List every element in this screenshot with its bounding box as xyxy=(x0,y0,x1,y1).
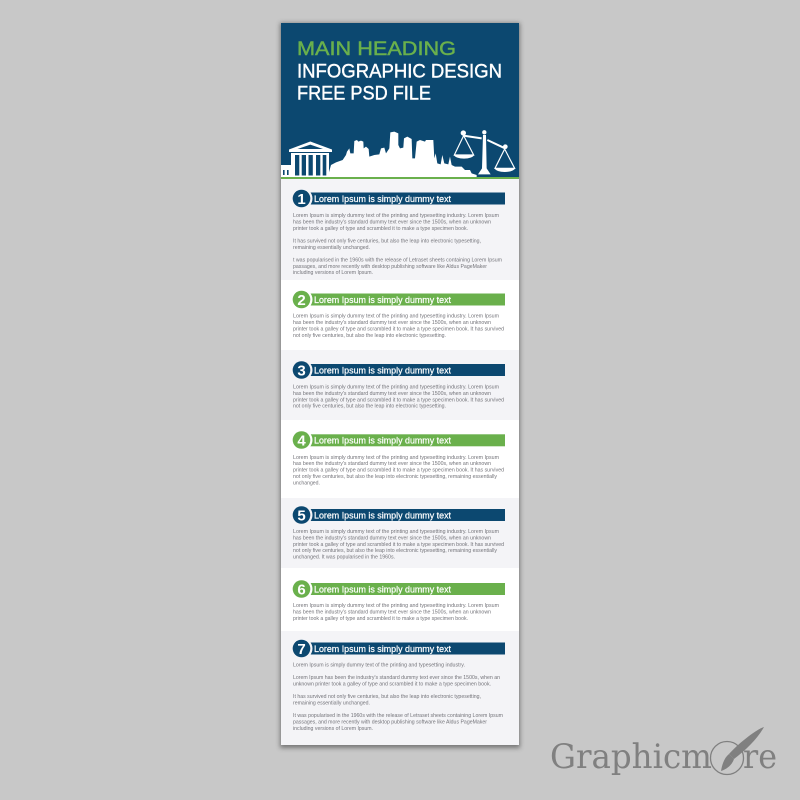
section 1 number badge xyxy=(292,188,312,209)
panel: section 3 xyxy=(281,350,519,420)
section 7 body text: It has survived not only five centuries, but also the leap into electronic typesetting, xyxy=(293,694,481,700)
panel: section 7 xyxy=(281,631,519,745)
section 7 body text: Lorem Ipsum is simply dummy text of the printing and typesetting industry. xyxy=(293,663,465,669)
section 3 title bar xyxy=(310,364,505,376)
section 5 number badge: 5 xyxy=(297,508,306,524)
header panel xyxy=(281,23,519,177)
section 1 body text xyxy=(293,213,502,276)
logo suffix: re xyxy=(743,737,777,777)
section 5 body text: printer took a galley of type and scrambled it to make a type specimen book. It has survived xyxy=(293,542,504,548)
section 4 body text: Lorem Ipsum is simply dummy text of the printing and typesetting industry. Lorem Ipsum xyxy=(293,455,499,461)
section 3 body text xyxy=(293,384,504,410)
section 5 body text xyxy=(293,529,504,561)
section 2 body text: Lorem Ipsum is simply dummy text of the printing and typesetting industry. Lorem Ipsum xyxy=(293,314,499,320)
panel: section 2 xyxy=(281,280,519,350)
section 1 body text: It has survived not only five centuries, but also the leap into electronic typesetting, xyxy=(293,239,481,245)
icon: scales of justice xyxy=(454,130,515,174)
section 5 body text: has been the industry's standard dummy text ever since the 1500s, when an unknown xyxy=(293,535,491,541)
section 4 body text: unchanged. xyxy=(293,480,320,486)
subheading line 1: INFOGRAPHIC DESIGN xyxy=(297,60,502,82)
icon: brush in circle xyxy=(710,727,764,774)
main heading: MAIN HEADING xyxy=(297,38,456,60)
section 1 body text: t was popularised in the 1960s with the release of Letraset sheets containing Lorem Ipsum xyxy=(293,257,502,263)
section 4 body text xyxy=(293,455,504,486)
section 6 body text: has been the industry's standard dummy text ever since the 1500s, when an unknown xyxy=(293,609,491,615)
section 4 title: Lorem Ipsum is simply dummy text xyxy=(314,436,451,446)
section 2 body text: has been the industry's standard dummy text ever since the 1500s, when an unknown xyxy=(293,320,491,326)
section 7 title bar xyxy=(310,642,505,654)
city skyline xyxy=(328,132,477,177)
section 7 body text: unknown printer took a galley of type and scrambled it to make a type specimen book. xyxy=(293,682,491,688)
panel: section 5 xyxy=(281,498,519,568)
section 1 body text: has been the industry's standard dummy text ever since the 1500s, when an unknown xyxy=(293,219,491,225)
section 6 body text xyxy=(293,603,499,622)
section 7 number badge xyxy=(292,638,312,659)
section 3 title: Lorem Ipsum is simply dummy text xyxy=(314,365,451,375)
section 4 number badge xyxy=(292,430,312,450)
section 7 body text: Lorem Ipsum has been the industry's standard dummy text ever since the 1500s, when an xyxy=(293,675,500,681)
section 7 body text: remaining essentially unchanged. xyxy=(293,701,370,707)
section 4 body text: has been the industry's standard dummy text ever since the 1500s, when an unknown xyxy=(293,461,491,467)
section 5 body text: unchanged. It was popularised in the 1960s. xyxy=(293,555,395,561)
section 5 body text: not only five centuries, but also the leap into electronic typesetting, remaining essentially xyxy=(293,548,497,554)
infographic card xyxy=(281,23,519,745)
section 4 title bar xyxy=(310,434,505,446)
section 5 title: Lorem Ipsum is simply dummy text xyxy=(314,510,451,520)
section 2 title: Lorem Ipsum is simply dummy text xyxy=(314,295,451,305)
section 1 number badge: 1 xyxy=(297,191,306,208)
section 3 body text: Lorem Ipsum is simply dummy text of the printing and typesetting industry. Lorem Ipsum xyxy=(293,384,499,390)
section 6 title: Lorem Ipsum is simply dummy text xyxy=(314,584,451,594)
panel: section 6 xyxy=(281,568,519,631)
section 5 title bar xyxy=(310,509,505,521)
section 2 body text xyxy=(293,314,504,339)
section 6 body text: Lorem Ipsum is simply dummy text of the printing and typesetting industry. Lorem Ipsum xyxy=(293,603,499,609)
section 5 body text: Lorem Ipsum is simply dummy text of the printing and typesetting industry. Lorem Ipsum xyxy=(293,529,499,535)
section 1 body text: printer took a galley of type and scrambled it to make a type specimen book. xyxy=(293,226,468,232)
section 6 title bar xyxy=(310,583,505,595)
section 2 number badge xyxy=(292,289,312,310)
section 3 number badge: 3 xyxy=(297,362,306,380)
logo wordmark: Graphicm xyxy=(550,737,712,777)
section 7 body text: passages, and more recently with desktop publishing software like Aldus PageMaker xyxy=(293,720,487,726)
section 6 body text: printer took a galley of type and scrambled it to make a type specimen book. xyxy=(293,616,468,622)
section 7 number badge: 7 xyxy=(297,641,306,658)
section 1 body text: passages, and more recently with desktop publishing software like Aldus PageMaker xyxy=(293,264,487,270)
section 3 body text: has been the industry's standard dummy text ever since the 1500s, when an unknown xyxy=(293,391,491,397)
section 5 number badge xyxy=(292,504,312,526)
section 1 title: Lorem Ipsum is simply dummy text xyxy=(314,194,451,204)
section 4 number badge: 4 xyxy=(297,432,306,450)
section 1 body text: remaining essentially unchanged. xyxy=(293,245,370,251)
section 2 body text: not only five centuries, but also the leap into electronic typesetting. xyxy=(293,333,446,339)
section 4 body text: not only five centuries, but also the leap into electronic typesetting, remaining essentially xyxy=(293,474,497,480)
panel: section 1 xyxy=(281,179,519,280)
watermark logo xyxy=(550,727,777,777)
section 7 body text xyxy=(293,663,503,732)
section 4 body text: printer took a galley of type and scrambled it to make a type specimen book. It has survived xyxy=(293,468,504,474)
section 3 body text: printer took a galley of type and scrambled it to make a type specimen book. It has survived xyxy=(293,397,504,403)
section 1 body text: Lorem Ipsum is simply dummy text of the printing and typesetting industry. Lorem Ipsum xyxy=(293,213,499,219)
panel: section 4 xyxy=(281,420,519,498)
section 2 body text: printer took a galley of type and scrambled it to make a type specimen book. It has survived xyxy=(293,326,504,332)
section 7 body text: including versions of Lorem Ipsum. xyxy=(293,726,373,732)
section 2 title bar xyxy=(310,294,505,306)
section 2 number badge: 2 xyxy=(297,292,306,309)
section 6 number badge xyxy=(292,578,312,600)
section 1 body text: including versions of Lorem Ipsum. xyxy=(293,270,373,276)
section 3 number badge xyxy=(292,360,312,380)
green divider xyxy=(281,177,519,179)
section 1 title bar xyxy=(310,192,505,204)
section 7 title: Lorem Ipsum is simply dummy text xyxy=(314,644,451,654)
section 6 number badge: 6 xyxy=(297,582,306,598)
section 3 body text: not only five centuries, but also the leap into electronic typesetting. xyxy=(293,404,446,410)
icon: courthouse xyxy=(281,142,332,177)
section 7 body text: It was popularised in the 1960s with the release of Letraset sheets containing Lorem Ipsum xyxy=(293,713,503,719)
subheading line 2: FREE PSD FILE xyxy=(297,82,431,104)
